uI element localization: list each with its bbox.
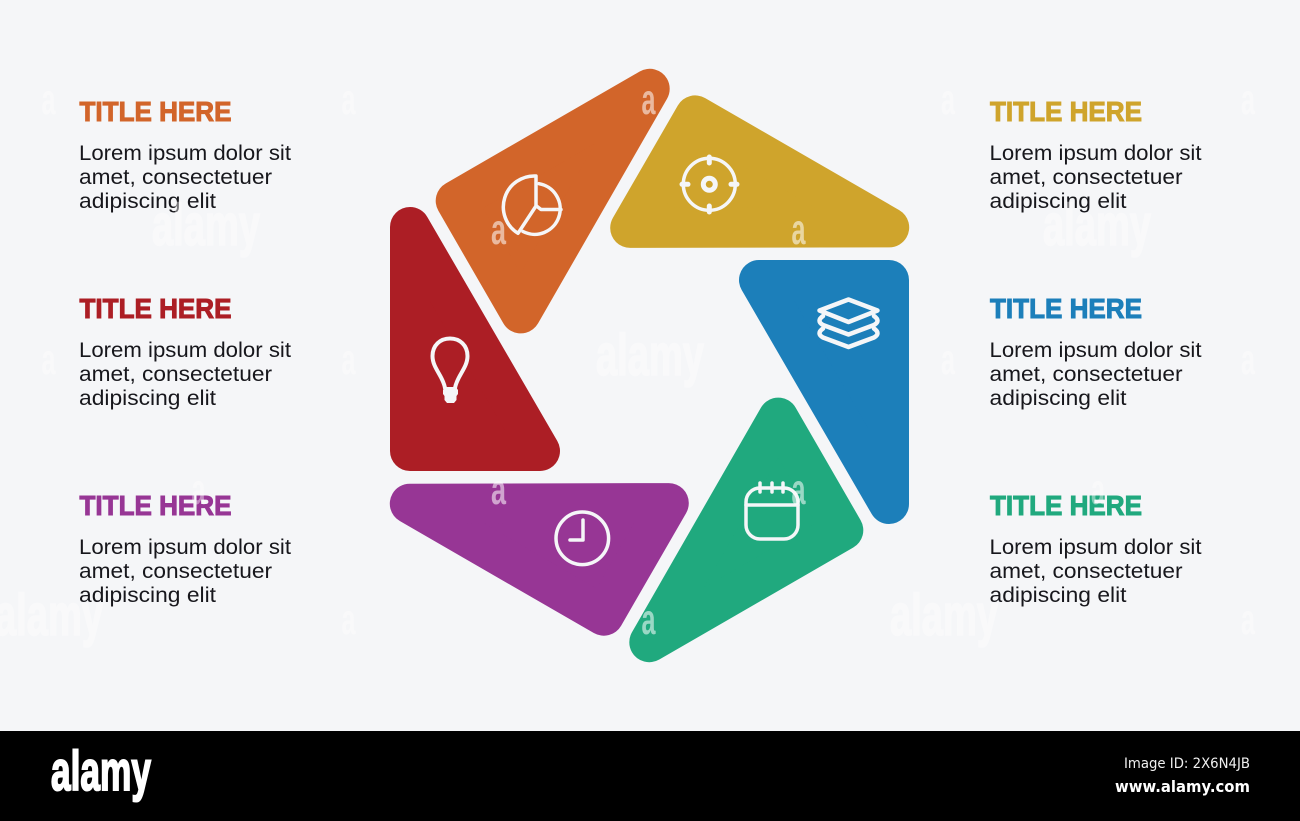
watermarks: a bbox=[941, 76, 956, 124]
watermarks: a bbox=[342, 336, 356, 384]
text block: red: adipiscing elit bbox=[79, 387, 216, 410]
text block: blue: Lorem ipsum dolor sit bbox=[990, 339, 1202, 362]
image id: Image ID: 2X6N4JB bbox=[1124, 756, 1250, 772]
segment: gold bbox=[630, 115, 889, 228]
watermarks: a bbox=[1091, 466, 1106, 514]
text block: green: adipiscing elit bbox=[990, 584, 1127, 607]
text block: purple bbox=[79, 490, 291, 607]
text block: red: amet, consectetuer bbox=[79, 363, 272, 386]
text block: orange bbox=[79, 96, 291, 213]
text block: blue: TITLE HERE bbox=[990, 293, 1142, 324]
text block: purple: amet, consectetuer bbox=[79, 560, 272, 583]
text block: gold: TITLE HERE bbox=[990, 96, 1142, 127]
website: www.alamy.com bbox=[1115, 777, 1250, 796]
watermarks: alamy bbox=[152, 193, 260, 258]
watermarks bbox=[0, 76, 1256, 648]
icon: layers bbox=[820, 300, 878, 347]
text block: red: TITLE HERE bbox=[80, 293, 232, 324]
icon: light bulb bbox=[432, 338, 468, 403]
watermarks: a bbox=[1241, 336, 1256, 384]
text block: orange: amet, consectetuer bbox=[79, 166, 272, 189]
watermarks: a bbox=[342, 596, 356, 644]
watermarks: a bbox=[792, 206, 806, 254]
segment: purple bbox=[410, 503, 669, 616]
watermarks: a bbox=[192, 466, 206, 514]
watermarks: alamy bbox=[1043, 193, 1151, 258]
watermarks: a bbox=[642, 76, 656, 124]
text block: orange: TITLE HERE bbox=[80, 96, 232, 127]
icon: calendar bbox=[746, 483, 798, 539]
text block: blue: adipiscing elit bbox=[990, 387, 1127, 410]
text block: green: amet, consectetuer bbox=[990, 560, 1183, 583]
text block: red: Lorem ipsum dolor sit bbox=[79, 339, 291, 362]
segment: orange bbox=[456, 89, 650, 313]
text block: purple: TITLE HERE bbox=[80, 490, 232, 521]
text block: blue bbox=[990, 293, 1202, 410]
segment: red bbox=[410, 227, 540, 451]
text block: gold: amet, consectetuer bbox=[990, 166, 1183, 189]
text block: purple: Lorem ipsum dolor sit bbox=[79, 536, 291, 559]
text block: green bbox=[990, 490, 1202, 607]
segment: blue bbox=[759, 280, 889, 504]
segment: green bbox=[649, 418, 843, 642]
text block: red bbox=[79, 293, 291, 410]
text block: gold bbox=[990, 96, 1202, 213]
watermarks: a bbox=[792, 466, 806, 514]
watermarks: a bbox=[1241, 596, 1256, 644]
text block: green: Lorem ipsum dolor sit bbox=[990, 536, 1202, 559]
text block: green: TITLE HERE bbox=[990, 490, 1142, 521]
footer logo: alamy bbox=[51, 739, 151, 802]
text block: blue: amet, consectetuer bbox=[990, 363, 1183, 386]
watermarks: a bbox=[642, 596, 656, 644]
text block: gold: Lorem ipsum dolor sit bbox=[990, 142, 1202, 165]
text block: orange: Lorem ipsum dolor sit bbox=[79, 142, 291, 165]
hexagon diagram bbox=[410, 89, 889, 642]
watermarks: a bbox=[42, 336, 56, 384]
watermarks: alamy bbox=[596, 323, 704, 388]
footer bar bbox=[0, 731, 1300, 821]
icon: clock bbox=[556, 512, 609, 565]
watermarks: a bbox=[1241, 76, 1256, 124]
watermarks: a bbox=[491, 206, 507, 254]
watermarks: a bbox=[42, 76, 56, 124]
text block: orange: adipiscing elit bbox=[79, 190, 216, 213]
text block: gold: adipiscing elit bbox=[990, 190, 1127, 213]
watermarks: a bbox=[342, 76, 356, 124]
watermarks: a bbox=[941, 336, 956, 384]
icon: target bbox=[682, 157, 737, 212]
watermarks: alamy bbox=[890, 583, 998, 648]
text block: purple: adipiscing elit bbox=[79, 584, 216, 607]
icon: pie chart bbox=[503, 176, 561, 234]
watermarks: a bbox=[491, 466, 507, 514]
